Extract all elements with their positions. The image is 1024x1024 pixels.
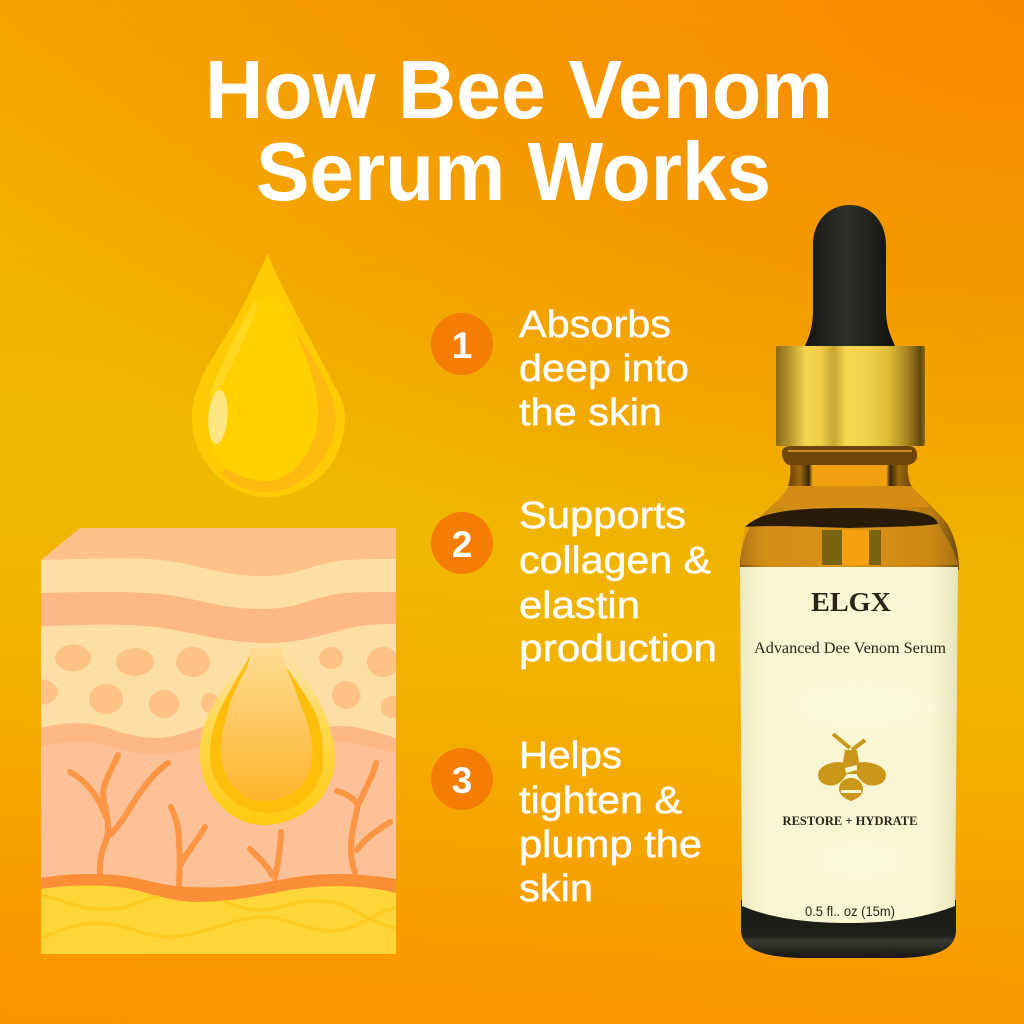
step 2 text: production xyxy=(519,628,717,670)
step 3 text: Helps xyxy=(519,735,622,777)
black base xyxy=(741,900,956,958)
step 2 xyxy=(431,495,717,670)
step 1 text xyxy=(519,304,689,434)
title xyxy=(205,43,833,218)
step 3 text: tighten & xyxy=(519,780,682,822)
serum drop absorbing xyxy=(200,648,335,825)
dropper bulb xyxy=(805,205,895,346)
product bottle xyxy=(740,205,959,958)
icon: bee xyxy=(818,734,886,801)
skin surface layer xyxy=(41,528,396,576)
step 2 text xyxy=(519,495,717,670)
title: How Bee Venom xyxy=(205,43,833,136)
step 1 text: Absorbs xyxy=(519,304,671,346)
step 2 text: elastin xyxy=(519,585,640,627)
step 3 text xyxy=(519,735,702,910)
dermis cream layer xyxy=(41,624,396,738)
lower peach band xyxy=(41,723,396,754)
brand name: ELGX xyxy=(811,587,892,617)
peach band xyxy=(41,592,396,643)
badge 1: 1 xyxy=(452,325,472,366)
gold collar xyxy=(776,346,925,446)
badge 2: 2 xyxy=(452,524,472,565)
badge 2 xyxy=(431,512,493,574)
dermis layer xyxy=(41,742,396,900)
badge 1 xyxy=(431,313,493,375)
epidermis cream layer xyxy=(41,558,396,609)
step 3 text: plump the xyxy=(519,824,702,866)
bottle glass xyxy=(740,446,959,570)
step 3 text: skin xyxy=(519,868,593,910)
step 1 text: the skin xyxy=(519,392,662,434)
fibre lines xyxy=(41,895,396,937)
step 1 xyxy=(431,304,689,434)
erased print patches xyxy=(790,679,930,731)
blood vessels xyxy=(70,755,390,885)
badge 3: 3 xyxy=(452,760,472,801)
subcutaneous yellow layer xyxy=(41,885,396,954)
fat cells xyxy=(18,644,403,718)
step 1 text: deep into xyxy=(519,348,689,390)
step 2 text: collagen & xyxy=(519,540,711,582)
title: Serum Works xyxy=(256,125,771,218)
volume: 0.5 fl.. oz (15m) xyxy=(805,904,895,919)
step 3 xyxy=(431,735,702,910)
panel: skin cross-section xyxy=(18,528,403,954)
orange vessel band xyxy=(41,874,396,902)
step 2 text: Supports xyxy=(519,495,686,537)
product name: Advanced Dee Venom Serum xyxy=(754,640,946,657)
badge 3 xyxy=(431,748,493,810)
cream label xyxy=(740,567,958,923)
tagline: RESTORE + HYDRATE xyxy=(782,814,918,828)
icon: serum drop xyxy=(192,253,345,497)
